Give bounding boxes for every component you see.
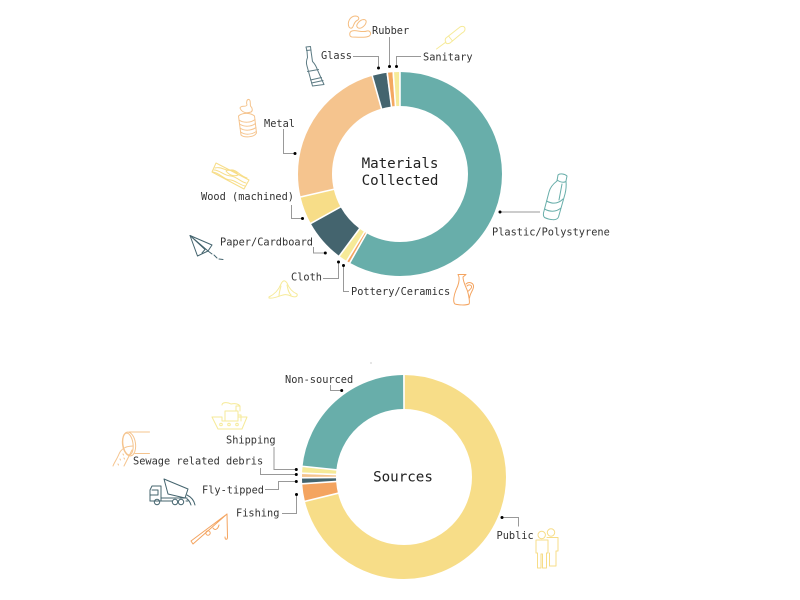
icon: rubber <box>348 16 371 37</box>
label: shipping: Shipping <box>226 434 276 446</box>
label: plastic/polystyrene: Plastic/Polystyrene <box>492 226 610 238</box>
label: cloth <box>291 260 340 284</box>
icon: metal can <box>238 99 256 137</box>
label: non-sourced <box>285 374 353 392</box>
label: sewage related debris: Sewage related debris <box>133 456 263 468</box>
icon: cloth <box>269 281 297 298</box>
label: pottery/ceramics <box>342 264 450 298</box>
icon: people <box>536 529 558 568</box>
label: public <box>496 516 534 542</box>
title: materials collected: Collected <box>362 173 438 189</box>
label: plastic/polystyrene <box>492 210 610 238</box>
title: materials collected: Materials <box>362 156 438 172</box>
label: paper/cardboard <box>220 236 327 254</box>
label: fishing <box>236 493 298 520</box>
icon: pottery jug <box>454 274 474 305</box>
label: metal <box>264 118 296 155</box>
tiny mark <box>370 362 372 364</box>
label: pottery/ceramics: Pottery/Ceramics <box>351 286 450 298</box>
icon: paper plane <box>190 236 223 260</box>
label: sewage related debris <box>133 456 298 476</box>
label: fly-tipped: Fly-tipped <box>202 484 264 496</box>
icon: sanitary <box>436 26 465 49</box>
icon: tipper truck <box>150 479 195 505</box>
label: rubber: Rubber <box>372 25 409 37</box>
label: shipping <box>226 434 298 471</box>
donut chart: sources <box>294 367 489 562</box>
label: non-sourced: Non-sourced <box>285 374 353 386</box>
label: rubber <box>372 25 409 68</box>
panel: materials collected <box>190 16 610 305</box>
icon: ship <box>212 403 247 429</box>
label: wood (machined): Wood (machined) <box>201 191 294 203</box>
title: sources: Sources <box>373 470 433 486</box>
label: metal: Metal <box>264 118 295 130</box>
title: materials collected <box>362 156 438 189</box>
label: wood (machined) <box>201 191 304 220</box>
icon: fishing rod <box>191 514 228 544</box>
label: fly-tipped <box>202 480 298 496</box>
label: sanitary <box>395 52 473 68</box>
label: cloth: Cloth <box>291 272 322 284</box>
icon: sewage pipe <box>113 431 150 466</box>
panel: sources <box>113 362 558 568</box>
label: fishing: Fishing <box>236 508 279 520</box>
icon: glass bottle <box>306 46 324 86</box>
donut chart: materials <box>293 64 485 270</box>
icon: wood plank <box>212 163 249 189</box>
icon: plastic bottle <box>543 174 567 220</box>
label: sanitary: Sanitary <box>423 52 473 64</box>
label: glass <box>321 50 380 70</box>
label: glass: Glass <box>321 50 352 62</box>
label: public: Public <box>496 530 534 542</box>
label: paper/cardboard: Paper/Cardboard <box>220 236 313 248</box>
